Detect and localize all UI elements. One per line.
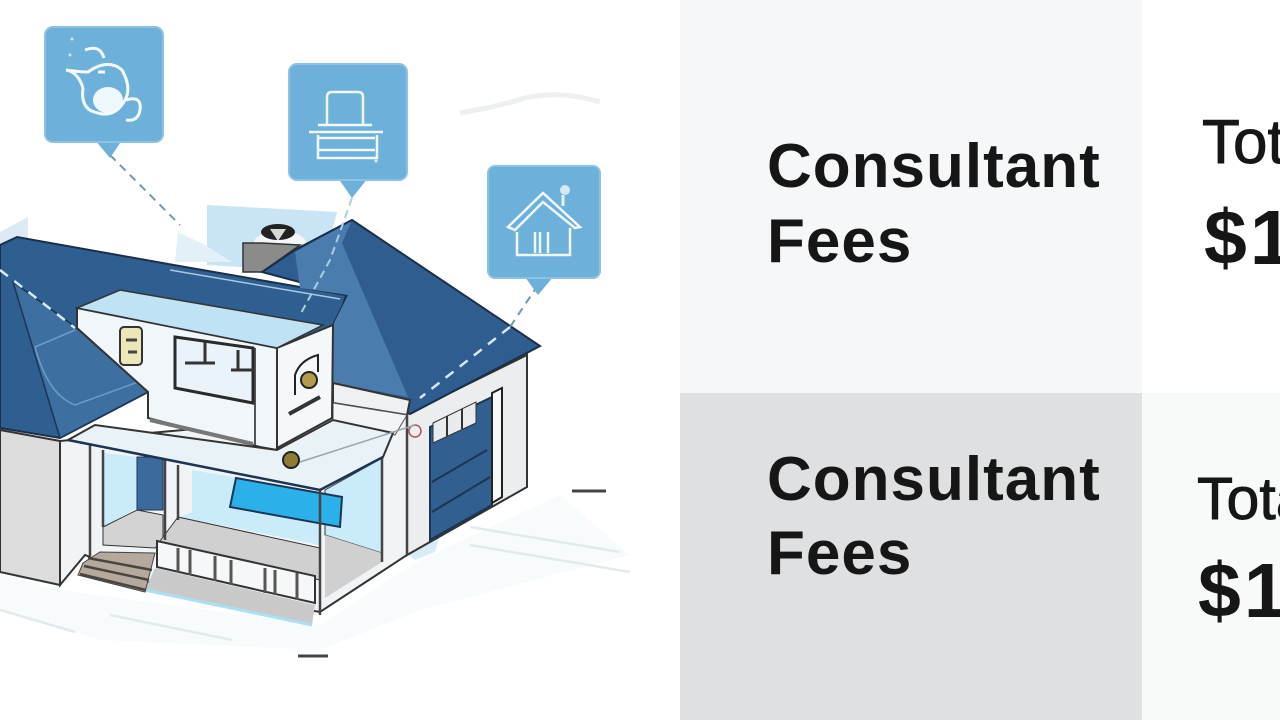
heading: consultant fees top [767, 132, 1101, 276]
right wing wall [405, 355, 527, 555]
stairs [78, 552, 155, 592]
band under right roof [333, 383, 410, 415]
icon: teapot callout [45, 27, 163, 158]
heading: consultant fees bottom [767, 445, 1101, 588]
panel: bottom label cell [680, 393, 1142, 720]
panel: top label cell [680, 0, 1142, 393]
pale backdrop and chimney [207, 205, 337, 270]
garage door [430, 397, 492, 540]
panel: bottom value cell [1142, 393, 1280, 720]
box strip [150, 420, 253, 444]
dashed connector lines [0, 155, 538, 462]
left main wall [0, 430, 60, 585]
back left roof [0, 237, 346, 438]
heading: consultant fees top: Consultant [767, 132, 1101, 201]
upper box [77, 308, 277, 450]
icon: printer callout [289, 64, 407, 198]
right roof [262, 220, 540, 414]
roof ridge [170, 270, 340, 299]
heading: consultant fees bottom: Consultant [767, 445, 1101, 514]
box window [175, 337, 253, 403]
lower left hip facet [13, 282, 148, 438]
heading: consultant fees bottom: Fees [767, 519, 912, 588]
illustration: house with callout icons [0, 26, 630, 658]
porch body [60, 410, 407, 612]
distant cloud sketch [460, 95, 600, 113]
porch roof [68, 420, 393, 490]
window [230, 478, 342, 527]
panel: top value cell [1142, 0, 1280, 393]
railing [157, 541, 315, 603]
box lamps [120, 327, 142, 365]
heading: consultant fees top: Fees [767, 207, 912, 276]
house [0, 205, 540, 625]
icon: home callout [488, 166, 600, 295]
ground shadow and sketch lines [0, 491, 630, 656]
